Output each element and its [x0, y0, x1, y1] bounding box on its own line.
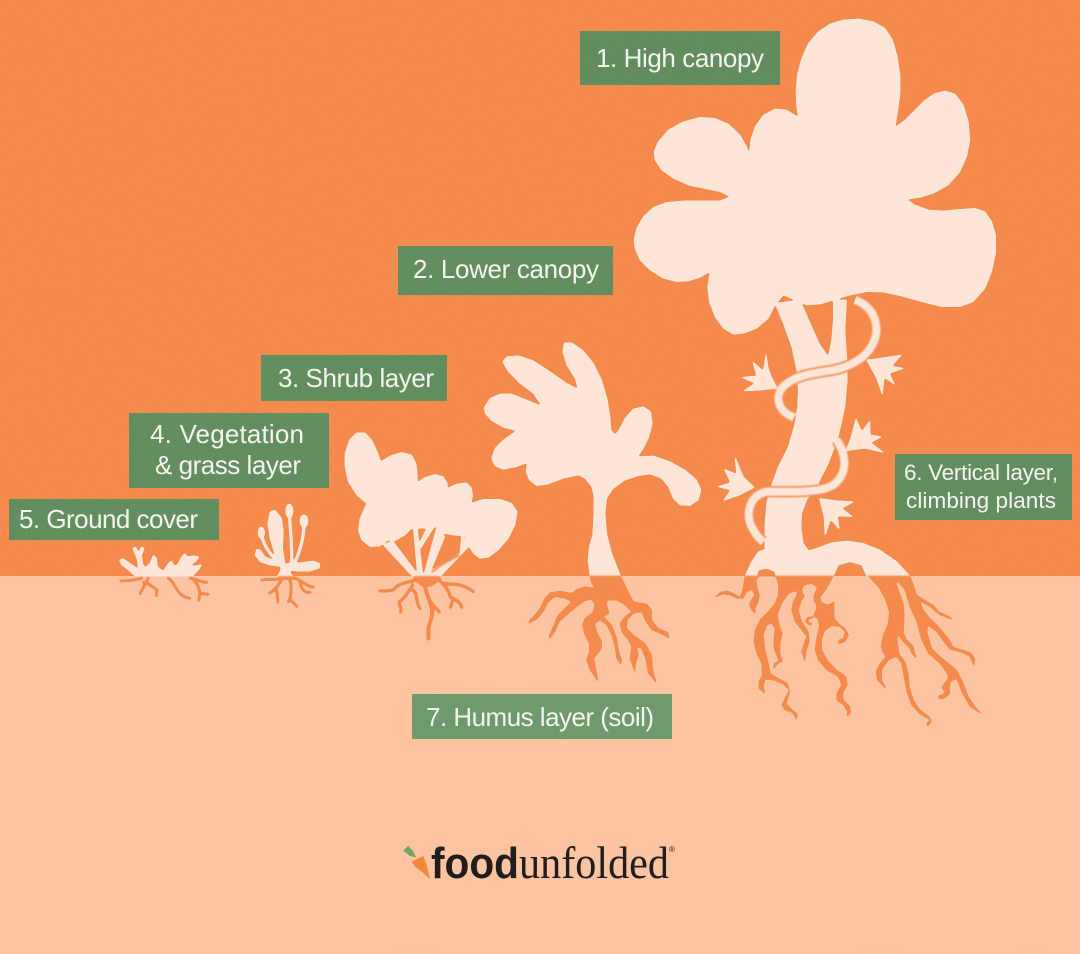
- label: 5. Ground cover: [9, 499, 219, 540]
- logo: foodunfolded: [403, 838, 675, 888]
- tree roots: [715, 572, 982, 727]
- plant: shrub: [345, 433, 517, 639]
- tree canopy: [634, 19, 996, 334]
- ground cover plant: [119, 547, 208, 600]
- logo: foodunfolded: unfolded: [519, 838, 669, 888]
- label: 3. Shrub layer: [261, 355, 447, 401]
- panel: soil background: [0, 576, 1080, 954]
- climbing plant flowers: [717, 353, 904, 536]
- vegetation plant: [255, 504, 320, 607]
- label: 6. Vertical layer, climbing plants: 6. Vertical layer,: [904, 460, 1058, 485]
- label: 2. Lower canopy: [398, 246, 613, 295]
- label: 4. Vegetation and grass layer: & grass layer: [155, 450, 301, 480]
- label: 7. Humus layer (soil): [412, 694, 672, 739]
- icon: carrot: [403, 846, 430, 879]
- plant: lower canopy tree: [484, 343, 701, 683]
- plants: vegetation layer and ground cover: [119, 504, 320, 607]
- plants: all forest layers: [119, 19, 996, 727]
- label: 6. Vertical layer, climbing plants: climbing plants: [906, 488, 1056, 513]
- plant: high canopy tree: [634, 19, 996, 727]
- label: 2. Lower canopy: 2. Lower canopy: [413, 254, 599, 284]
- label: 3. Shrub layer: 3. Shrub layer: [278, 363, 434, 393]
- shrub roots: [380, 579, 473, 639]
- shrub stems: [383, 527, 469, 576]
- label: 4. Vegetation and grass layer: 4. Vegetation: [150, 419, 304, 449]
- panel: sky background: [0, 0, 1080, 576]
- lower canopy foliage and trunk: [484, 343, 701, 576]
- lower canopy roots: [529, 576, 669, 683]
- label: 1. High canopy: 1. High canopy: [596, 43, 764, 73]
- tree trunk and vines: [717, 300, 910, 576]
- label: 7. Humus layer (soil): 7. Humus layer (soil): [426, 702, 654, 732]
- label: 6. Vertical layer, climbing plants: [895, 454, 1072, 520]
- logo: foodunfolded: food: [431, 839, 519, 888]
- label: 4. Vegetation and grass layer: [129, 413, 329, 488]
- label: 5. Ground cover: 5. Ground cover: [19, 504, 198, 534]
- logo: foodunfolded: ®: [669, 845, 675, 854]
- label: 1. High canopy: [580, 31, 780, 85]
- shrub foliage: [345, 433, 517, 558]
